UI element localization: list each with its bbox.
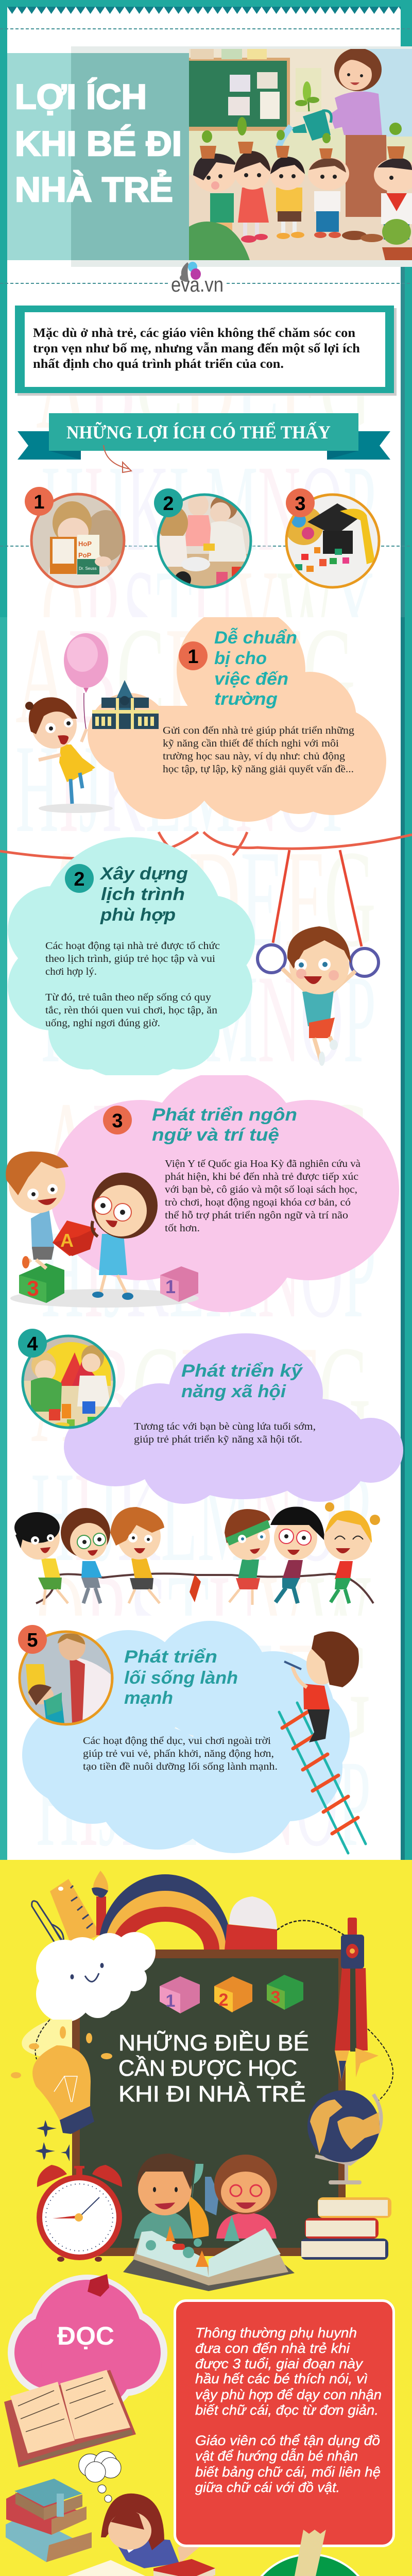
background watermark alphabet: HIJKLMNOP <box>36 1735 371 1872</box>
body 4: Tương tác với bạn bè cùng lứa tuổi sớm, <box>134 1421 316 1432</box>
photo circle 1: girl reading <box>30 493 126 588</box>
child 5 <box>270 1506 324 1603</box>
panel: benefit 3 cloud <box>50 1072 399 1312</box>
number 2: 2 <box>74 869 85 890</box>
badge 3 <box>286 488 315 517</box>
teacher <box>330 48 387 242</box>
badge 4 <box>18 1329 47 1358</box>
icon: eraser <box>225 1896 277 1950</box>
hero illustration: teacher watering plants on children's heads <box>189 48 412 260</box>
illustration: tug of war <box>14 1502 380 1605</box>
badge 2: 2 <box>163 493 174 515</box>
photo circle 3: graduation cap and letters <box>284 494 381 588</box>
body 3: thể hỗ trợ phát triển ngôn ngữ và trí não <box>165 1210 348 1221</box>
background watermark alphabet: HIJKLMNOP <box>41 1204 376 1344</box>
hero title panel <box>7 53 189 260</box>
number 1: 1 <box>187 646 199 668</box>
child 3 <box>110 1507 164 1603</box>
body 2: chơi hợp lý. <box>45 966 97 977</box>
icon: compass <box>335 1918 379 2081</box>
body 3: Viện Y tế Quốc gia Hoa Kỳ đã nghiên cứu và <box>165 1158 360 1170</box>
block cubes 1 2 3: 1 <box>166 1991 175 2011</box>
logo: eva.vn <box>170 262 225 296</box>
child with yellow shirt <box>270 157 305 239</box>
body 5: Các hoạt động thể dục, vui chơi ngoài trời <box>83 1735 271 1747</box>
number 3: 3 <box>112 1110 123 1132</box>
panel: reading text: được 3 tuổi, giai đoạn này <box>195 2356 364 2371</box>
arrow <box>104 445 131 472</box>
panel: reading text: hầu hết các bé thích nói, vì <box>195 2371 368 2386</box>
hero title <box>15 77 182 209</box>
badge 4: 4 <box>27 1333 38 1355</box>
block cubes 1 2 3 <box>160 1975 303 2013</box>
heading 1: Dễ chuẩn <box>214 628 297 648</box>
body 2: uống, nghỉ ngơi đúng giờ. <box>45 1018 160 1029</box>
heading 5: lối sống lành <box>124 1668 238 1688</box>
illustration: two children with blocks <box>6 1151 199 1308</box>
heading 5: mạnh <box>124 1688 173 1708</box>
panel: reading text: giữa chữ cái với đồ vật. <box>195 2480 340 2495</box>
icon: ruler <box>50 1879 101 1945</box>
badge 2 <box>154 488 183 517</box>
body 1: kỹ năng cần thiết để thích nghi với môi <box>163 738 339 749</box>
photo circle 5: children at playground <box>19 1631 113 1725</box>
hero backdrop <box>71 46 412 267</box>
icon: plus marks <box>35 2120 70 2161</box>
body 4 <box>134 1421 316 1445</box>
badge 1: 1 <box>33 492 45 513</box>
banner: section heading: NHỮNG LỢI ÍCH CÓ THỂ THẤY <box>66 421 331 443</box>
board title: CẦN ĐƯỢC HỌC <box>118 2055 297 2081</box>
number 1 <box>179 641 208 670</box>
intro text: Mặc dù ở nhà trẻ, các giáo viên không thể chăm sóc con <box>33 326 355 340</box>
number 2 <box>65 864 94 893</box>
heading 3: Phát triển ngôn <box>152 1105 297 1125</box>
photo circle 1: girl reading: Dr. Seuss <box>79 566 97 571</box>
illustration: boy climbing ladder <box>279 1632 366 1853</box>
left teal border <box>0 0 7 1860</box>
background watermark alphabet: HIJKLMNOP <box>41 949 376 1089</box>
watering can <box>278 81 331 149</box>
plant pots on heads <box>200 142 405 159</box>
icon: rainbow <box>98 1874 232 1950</box>
panel: benefit 1 cloud <box>88 605 386 822</box>
body 1: trường học sau này, ví dụ như: chủ động <box>163 751 345 762</box>
badge 5: 5 <box>27 1630 38 1651</box>
icon: stack of books <box>301 2197 391 2260</box>
top zigzag edge <box>0 0 412 14</box>
illustration: two children with blocks: 3 <box>27 1276 39 1300</box>
panel: reading text: vậy phù hợp để dạy con nhận <box>195 2387 382 2402</box>
seedlings <box>202 117 402 143</box>
heading 4: năng xã hội <box>181 1382 287 1401</box>
illustration: open book <box>4 2370 136 2467</box>
icon: white cloud with smile <box>36 1932 156 2022</box>
body 1: học tập, tự lập, kỹ năng giải quyết vấn đề... <box>163 764 354 775</box>
background watermark alphabet: ABCDEFG <box>15 599 355 753</box>
body 3: phát hiện, khi bé đến nhà trẻ được tiếp xúc <box>165 1171 358 1182</box>
foreground plants <box>189 219 412 260</box>
body 2: Từ đó, trẻ tuân theo nếp sống có quy <box>45 992 211 1003</box>
illustration: two children with blocks: 1 <box>165 1276 176 1297</box>
heading 1: trường <box>214 689 278 709</box>
body 1: Gửi con đến nhà trẻ giúp phát triển những <box>163 725 354 736</box>
yellow section background <box>0 1860 412 2576</box>
child 4 <box>225 1509 270 1605</box>
body 2: theo lịch trình, giúp trẻ học tập và vui <box>45 953 215 964</box>
intro box <box>15 306 397 396</box>
heading 4: Phát triển kỹ <box>181 1361 303 1381</box>
badge 1 <box>25 487 54 516</box>
illustration: girl with balloon <box>25 633 113 813</box>
panel: reading text: vật để hướng dẫn bé nhận <box>195 2448 358 2464</box>
banner: section heading <box>18 413 390 460</box>
panel: benefit 4 cloud <box>64 1333 403 1504</box>
heading 3 <box>152 1105 297 1145</box>
badge 3: 3 <box>295 493 306 515</box>
illustration: children reading pop-up book <box>123 2154 295 2291</box>
panel: reading text: đưa con đến nhà trẻ khi <box>195 2341 350 2356</box>
heading 1: việc đến <box>214 669 288 689</box>
panel: reading label flower <box>8 2274 167 2416</box>
body 2: Các hoạt động tại nhà trẻ được tổ chức <box>45 940 220 952</box>
body 3: tốt hơn. <box>165 1223 200 1234</box>
board title: NHỮNG ĐIỀU BÉ <box>118 2030 309 2056</box>
logo: eva.vn: eva.vn <box>171 274 224 296</box>
intro text: trọn vẹn như bố mẹ, nhưng vẫn mang đến một số lợi ích <box>33 342 360 355</box>
right teal border <box>401 0 412 1860</box>
background watermark alphabet <box>16 396 374 1846</box>
blackboard <box>72 1950 346 2256</box>
heading 5: Phát triển <box>124 1647 217 1667</box>
panel: benefit 2 cloud <box>8 837 255 1079</box>
heading 1: bị cho <box>214 649 267 668</box>
background watermark alphabet: ABCDEFG <box>36 304 371 458</box>
body 3 <box>165 1158 360 1234</box>
photo circle 2: toddlers playing <box>157 494 252 590</box>
photo circle 4: children with toys <box>22 1334 115 1430</box>
icon: globe <box>307 2090 381 2184</box>
body 2 <box>45 940 220 1029</box>
icon: light bulb <box>11 2020 112 2134</box>
panel: reading text <box>175 2301 393 2546</box>
body 2: tắc, rèn thói quen vui chơi, học tập, ăn <box>45 1005 217 1016</box>
hero title: NHÀ TRẺ <box>15 170 173 209</box>
photo circle 1: girl reading: HoP <box>78 540 92 548</box>
body 4: giúp trẻ phát triển kỹ năng xã hội tốt. <box>134 1434 302 1445</box>
child with white shirt <box>308 157 349 238</box>
board title: KHI ĐI NHÀ TRẺ <box>118 2081 306 2107</box>
background watermark alphabet: ABCDEFG <box>41 1073 371 1227</box>
child 6 <box>324 1502 380 1603</box>
panel: reading text: biết chữ cái, đọc từ đơn giản. <box>195 2402 379 2418</box>
illustration: boy on rings <box>258 926 379 1066</box>
background watermark alphabet: HIJKLMNOP <box>15 719 355 858</box>
icon: paper clip <box>32 1901 63 1949</box>
body 5: giúp trẻ vui vẻ, phấn khởi, năng động hơn, <box>83 1748 274 1759</box>
hero title: LỢI ÍCH <box>15 77 147 116</box>
rope and rings <box>0 832 412 946</box>
panel: reading text: biết bảng chữ cái, mối liên hệ <box>195 2464 381 2480</box>
child 2 <box>61 1508 110 1603</box>
illustration: two children with blocks: A <box>60 1230 74 1251</box>
heading 2 <box>99 864 188 925</box>
icon: school building <box>92 680 159 729</box>
intro text: nhất định cho quá trình phát triển của con. <box>33 357 284 371</box>
board title <box>118 2030 309 2107</box>
icon: paint brush <box>92 1871 108 1935</box>
number 3 <box>103 1106 132 1134</box>
panel: reading label flower: ĐỌC <box>57 2321 114 2350</box>
body 5 <box>83 1735 278 1772</box>
panel: writing label cloud <box>232 2530 393 2576</box>
background watermark alphabet: ABCDEFG <box>31 1613 371 1767</box>
background watermark alphabet: HIJKLMNOP <box>31 1446 371 1588</box>
child with green shirt <box>193 154 236 233</box>
heading 4 <box>181 1361 303 1401</box>
heading 2: phù hợp <box>100 905 176 925</box>
icon: alarm clock <box>37 2165 122 2262</box>
background watermark alphabet: HIJKLMNOP <box>41 439 376 577</box>
body 5: tạo tiền đề nuôi dưỡng lối sống lành mạnh. <box>83 1761 278 1772</box>
icon: pile of old books <box>6 2479 92 2562</box>
heading 2: lịch trình <box>101 885 185 904</box>
background watermark alphabet: ABCDEFG <box>31 1317 371 1471</box>
heading 1 <box>214 628 297 709</box>
badge 5 <box>18 1625 47 1654</box>
photo circle 1: girl reading: PoP <box>78 551 92 559</box>
block cubes 1 2 3: 2 <box>219 1990 228 2010</box>
child 1 <box>14 1512 68 1605</box>
panel: reading text: Thông thường phụ huynh <box>195 2325 357 2341</box>
panel: benefit 5 cloud <box>22 1621 350 1853</box>
body 3: trò chơi, hoạt động ngoại khóa cơ bản, có <box>165 1197 351 1208</box>
icon: thought bubble <box>79 2451 121 2502</box>
child with red scarf <box>374 158 412 240</box>
heading 2: Xây dựng <box>99 864 188 884</box>
heading 5 <box>124 1647 238 1708</box>
body 1 <box>163 725 354 775</box>
panel: reading text: Giáo viên có thể tận dụng đồ <box>195 2433 380 2448</box>
body 3: với bạn bè, cô giáo và một số loại sách học, <box>165 1184 357 1195</box>
illustration: girl reading on floor <box>67 2494 226 2576</box>
block cubes 1 2 3: 3 <box>271 1988 280 2007</box>
heading 3: ngữ và trí tuệ <box>152 1125 279 1145</box>
hero title: KHI BÉ ĐI <box>15 124 182 163</box>
intro text <box>33 326 360 371</box>
child with red dress <box>234 151 271 243</box>
